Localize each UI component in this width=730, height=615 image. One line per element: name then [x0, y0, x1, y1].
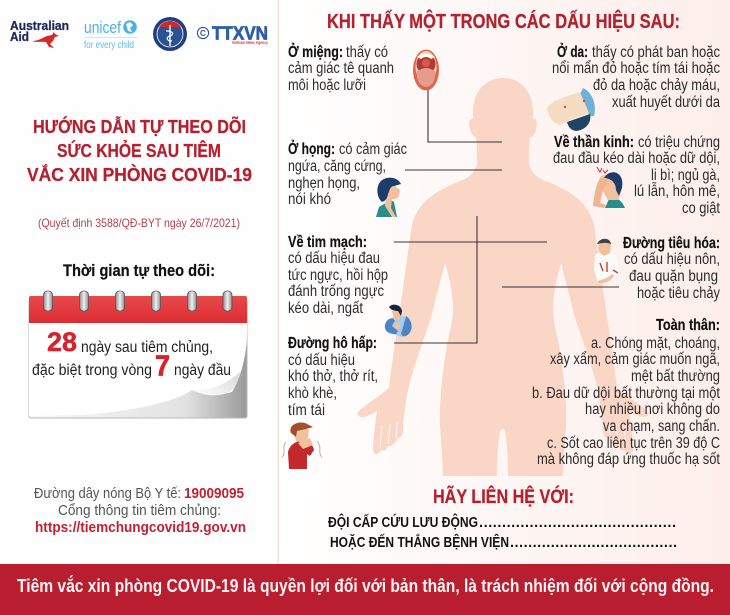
logo: Australian Aid: Australian — [10, 18, 69, 33]
panel: right column background — [279, 0, 730, 564]
text: digestive symptoms — [623, 235, 720, 302]
monitoring period heading: Thời gian tự theo dõi: — [63, 261, 215, 280]
text: throat symptoms: nói khó — [288, 191, 331, 208]
text: respiratory symptoms: khò khè, — [288, 385, 337, 402]
hotline and portal info: Cổng thông tin tiêm chủng: — [58, 502, 221, 519]
logo: Australian Aid: Aid — [10, 29, 29, 44]
text: throat symptoms — [288, 140, 407, 208]
text: mouth symptoms: Ở miệng: — [288, 43, 343, 61]
contact lines: HOẶC ĐẾN THẲNG BỆNH VIỆN — [330, 533, 509, 551]
contact lines — [328, 513, 677, 551]
calendar — [29, 291, 247, 418]
hotline and portal info: Đường dây nóng Bộ Y tế: — [34, 485, 181, 502]
logo: unicef: for every child — [84, 40, 134, 51]
text: respiratory symptoms: có dấu hiệu — [288, 352, 355, 369]
logo: unicef — [84, 18, 137, 51]
title: VẮC XIN PHÒNG COVID-19 — [27, 164, 252, 185]
leader line: cardiovascular — [394, 241, 547, 243]
text: cardiovascular symptoms — [288, 234, 388, 317]
title: SỨC KHỎE SAU TIÊM — [57, 140, 221, 161]
text: neurological symptoms: Về thần kinh: — [554, 134, 634, 151]
calendar text: ngày sau tiêm chủng, — [81, 339, 213, 356]
text: cardiovascular symptoms: Về tim mạch: — [288, 234, 367, 251]
footer banner — [0, 564, 730, 615]
title — [27, 116, 252, 185]
text: respiratory symptoms: Đường hô hấp: — [288, 335, 377, 352]
logo: unicef: unicef — [84, 18, 121, 37]
text: neurological symptoms: co giật — [682, 200, 721, 217]
text: mouth symptoms: cảm giác tê quanh — [288, 60, 394, 77]
hotline and portal info: https://tiemchungcovid19.gov.vn — [35, 519, 246, 536]
calendar text: 7 — [155, 350, 170, 382]
contact lines: ........................................... — [479, 515, 676, 531]
title: HƯỚNG DẪN TỰ THEO DÕI — [33, 116, 246, 137]
text: respiratory symptoms: khó thở, thở rít, — [288, 368, 378, 385]
contact lines: ĐỘI CẤP CỨU LƯU ĐỘNG — [328, 513, 478, 531]
icon: man with headache — [593, 167, 625, 208]
text: cardiovascular symptoms: kéo dài, ngất — [288, 300, 364, 317]
leader line: respiratory — [394, 216, 477, 343]
contact lines: ..................................... — [510, 535, 677, 551]
leader line: mouth — [428, 90, 502, 142]
text: cardiovascular symptoms: đánh trống ngực — [288, 283, 384, 300]
hotline and portal info — [34, 485, 246, 536]
calendar text: 28 — [47, 327, 77, 357]
text: digestive symptoms: đau quặn bụng — [629, 268, 718, 285]
text: mouth symptoms: thấy có — [346, 44, 388, 61]
human body silhouette — [358, 78, 648, 476]
logo: TTXVN: TTXVN — [212, 24, 268, 44]
text: mouth symptoms — [288, 43, 394, 94]
text: respiratory symptoms — [288, 335, 378, 419]
hotline and portal info: 19009095 — [184, 485, 244, 502]
text: skin symptoms: Ở da: — [557, 43, 588, 61]
heading: contact: HÃY LIÊN HỆ VỚI: — [433, 484, 574, 508]
calendar text — [32, 327, 231, 382]
text: mouth symptoms: môi hoặc lưỡi — [288, 77, 366, 94]
text: throat symptoms: ngứa, căng cứng, — [288, 158, 386, 175]
icon: man short of breath — [282, 422, 322, 469]
text: neurological symptoms — [553, 134, 721, 217]
text: cardiovascular symptoms: tức ngực, hồi hộp — [288, 267, 388, 284]
calendar text: ngày đầu — [174, 362, 231, 379]
text: skin symptoms — [552, 43, 720, 111]
panel: left column background — [0, 0, 278, 564]
icon: man with chest pain — [385, 305, 412, 337]
logo: Ministry of Health — [153, 17, 187, 51]
text: throat symptoms: nghẹn họng, — [288, 175, 360, 192]
decision reference: (Quyết định 3588/QĐ-BYT ngày 26/7/2021) — [38, 216, 240, 230]
logo: Australian Aid — [10, 18, 69, 48]
text: cardiovascular symptoms: có dấu hiệu đau — [288, 250, 380, 267]
text: general symptoms — [532, 317, 721, 468]
icon: open mouth — [413, 50, 439, 90]
text: respiratory symptoms: tím tái — [288, 402, 325, 419]
calendar rings — [44, 291, 232, 311]
icon: man with stomach ache — [594, 239, 619, 283]
logo: TTXVN: Vietnam News Agency — [232, 40, 268, 45]
leader line: throat — [405, 169, 502, 171]
calendar text: đặc biệt trong vòng — [32, 362, 152, 379]
icon: man with sore throat — [376, 178, 401, 217]
leader line: digestive — [502, 286, 619, 288]
icon: arm with rash — [547, 88, 595, 131]
logo: TTXVN: C — [200, 29, 206, 38]
text: throat symptoms: Ở họng: — [288, 140, 335, 158]
text: throat symptoms: có cảm giác — [339, 141, 407, 158]
